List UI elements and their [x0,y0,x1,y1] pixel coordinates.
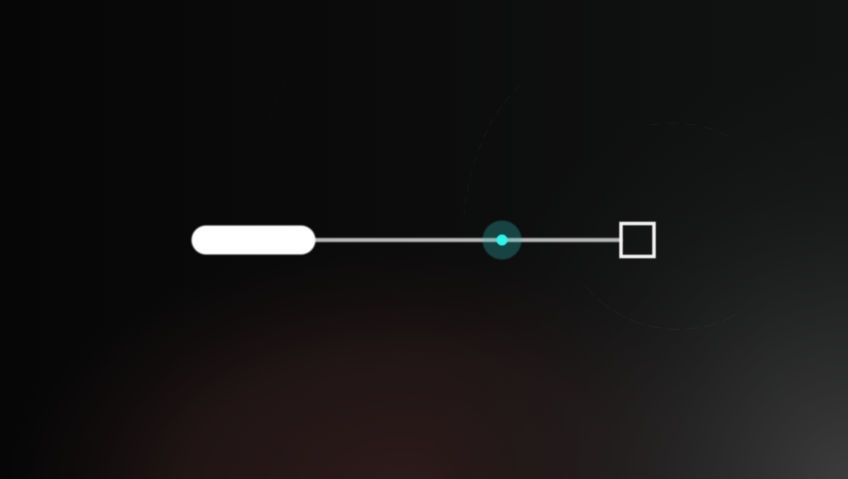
faint decorative arcs [257,80,735,329]
start node: white pill [192,226,316,254]
connector line [312,238,622,242]
end node: outlined square [621,224,654,256]
midpoint marker: cyan dot with halo [482,220,522,260]
